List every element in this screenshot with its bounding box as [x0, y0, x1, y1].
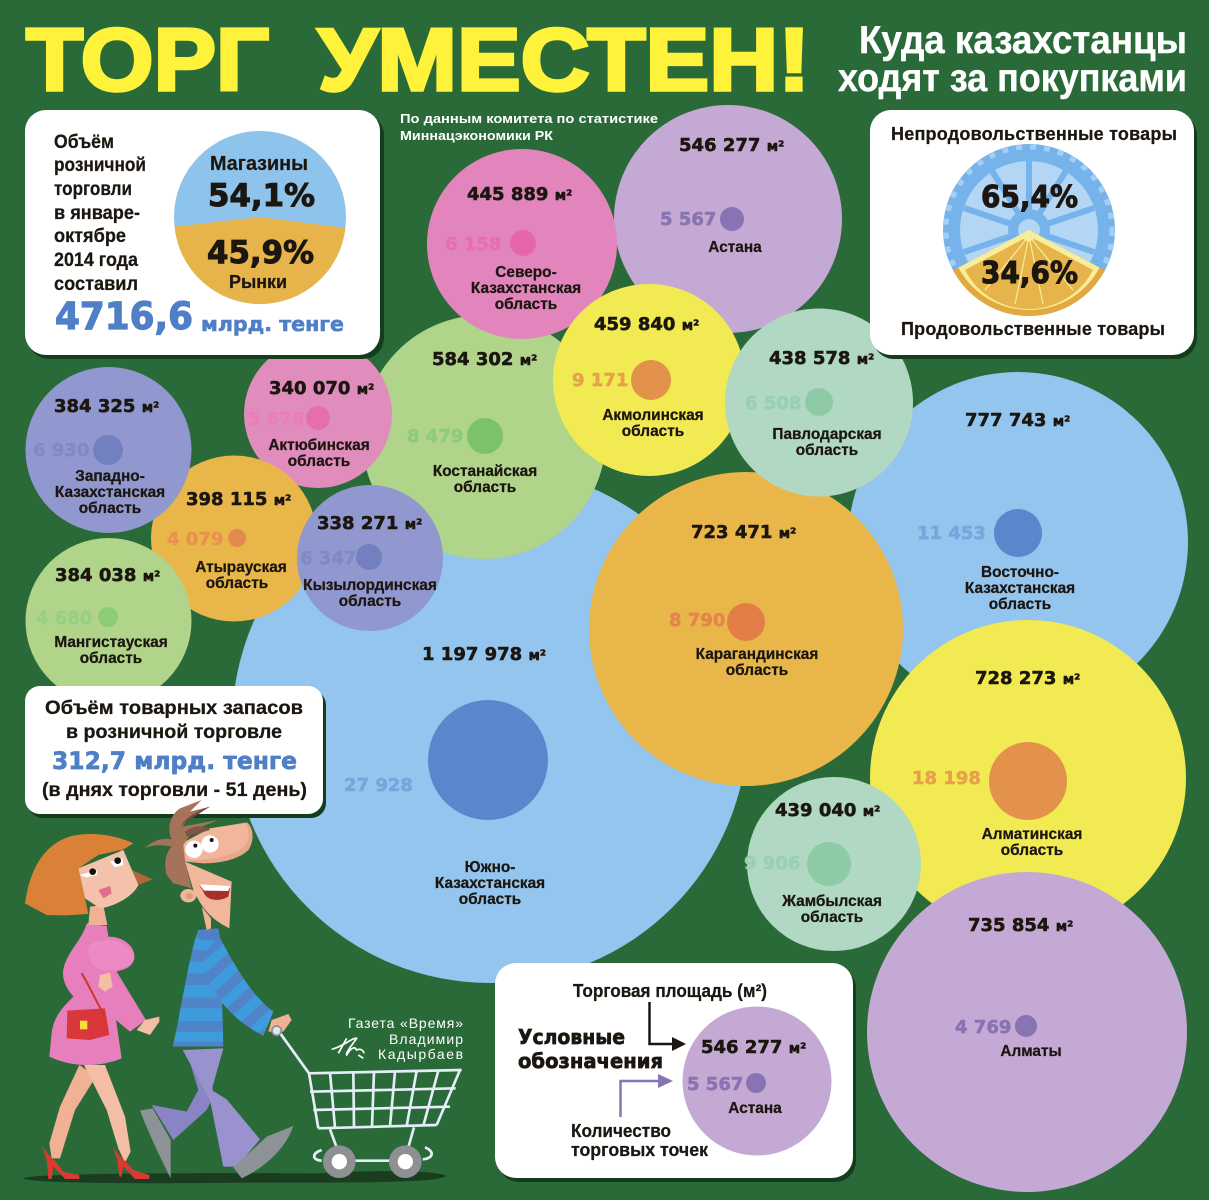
- legend sample circle: [682, 1006, 832, 1156]
- circle: Актюбинская область: область: [288, 453, 350, 470]
- panel: goods split: [870, 110, 1197, 359]
- circle: Актюбинская область: Актюбинская: [268, 437, 370, 454]
- circle: Актюбинская область: 340 070 м²: [269, 378, 374, 399]
- circle: Кызылординская область: Кызылординская: [303, 577, 437, 594]
- panel: legend: [495, 963, 856, 1182]
- circle: Алматы: 735 854 м²: [968, 915, 1073, 936]
- circle: Карагандинская область: 8 790: [669, 610, 725, 631]
- circle: Карагандинская область: 723 471 м²: [691, 522, 796, 543]
- title: [26, 10, 810, 109]
- circle: Жамбылская область: 9 906: [744, 853, 800, 874]
- circle: Алматинская область: Алматинская: [982, 826, 1082, 843]
- text: count label: торговых точек: [571, 1140, 709, 1160]
- circle: Павлодарская область: [725, 308, 913, 496]
- circle: Южно-Казахстанская область: Южно-: [465, 859, 515, 876]
- legend sample circle: Астана: [728, 1100, 782, 1117]
- big number: retail total: [55, 295, 344, 338]
- subtitle: [838, 19, 1187, 100]
- panel: inventory: [25, 686, 326, 818]
- circle: Акмолинская область: область: [622, 423, 684, 440]
- circle: Актюбинская область: 5 678: [248, 409, 304, 430]
- circle: Западно-Казахстанская область: [26, 367, 192, 533]
- text: legend heading: обозначения: [518, 1049, 663, 1073]
- circle: Западно-Казахстанская область: 384 325 м²: [54, 396, 159, 417]
- circle: Западно-Казахстанская область: 6 930: [33, 440, 89, 461]
- circle: Атырауская область: область: [206, 575, 268, 592]
- circle: Атырауская область: 4 079: [167, 529, 223, 550]
- text: area label: Торговая площадь (м²): [573, 981, 767, 1001]
- credit: [348, 1015, 463, 1062]
- circle: Астана: 546 277 м²: [679, 135, 784, 156]
- circle: Астана: [614, 105, 842, 333]
- circle: Северо-Казахстанская область: [427, 149, 617, 339]
- big number: retail total: 4716,6: [55, 295, 193, 338]
- circle: Алматинская область: область: [1001, 842, 1063, 859]
- circle: Костанайская область: 8 479: [407, 426, 463, 447]
- circle: Алматы: Алматы: [1000, 1043, 1062, 1060]
- circle: Северо-Казахстанская область: Северо-: [495, 264, 557, 281]
- circle: Кызылординская область: 6 347: [300, 548, 356, 569]
- circle: Восточно-Казахстанская область: Восточно-: [981, 564, 1059, 581]
- text: retail description: 2014 года: [54, 250, 138, 271]
- circle: Костанайская область: [362, 315, 606, 559]
- panel: inventory: (в днях торговли - 51 день): [42, 780, 307, 801]
- circle: Мангистауская область: область: [80, 650, 142, 667]
- credit: Кадырбаев: [378, 1046, 463, 1062]
- circle: Кызылординская область: [297, 485, 443, 631]
- circle: Южно-Казахстанская область: 1 197 978 м²: [422, 644, 546, 665]
- source note: [400, 111, 658, 143]
- circle: Жамбылская область: [744, 777, 921, 951]
- text: retail description: розничной: [54, 155, 146, 176]
- circle: Жамбылская область: область: [801, 909, 863, 926]
- chart: wheel and orange slice: 65,4%: [981, 180, 1078, 215]
- circle: Северо-Казахстанская область: 445 889 м²: [467, 184, 572, 205]
- text: count label: Количество: [571, 1121, 671, 1141]
- source note: Миннацэкономики РК: [400, 128, 553, 143]
- circle: Павлодарская область: 6 508: [745, 393, 801, 414]
- title: ТОРГ: [26, 10, 269, 109]
- circle: Восточно-Казахстанская область: [848, 372, 1188, 712]
- circle: Атырауская область: 398 115 м²: [186, 489, 291, 510]
- circle: Восточно-Казахстанская область: область: [989, 596, 1051, 613]
- signature: [332, 1038, 364, 1058]
- circle: Карагандинская область: область: [726, 662, 788, 679]
- circle: Костанайская область: 584 302 м²: [432, 349, 537, 370]
- circle: Жамбылская область: Жамбылская: [781, 893, 882, 910]
- circle: Алматы: [867, 872, 1187, 1192]
- big number: retail total: млрд. тенге: [201, 312, 344, 336]
- circle: Акмолинская область: [553, 284, 745, 476]
- chart: wheel and orange slice: [943, 144, 1115, 316]
- text: non-food heading: Непродовольственные товары: [891, 124, 1177, 144]
- text: retail description: Объём: [54, 132, 114, 153]
- pie: shops and markets: [174, 131, 346, 304]
- illustration: shoppers and cart: [23, 800, 462, 1183]
- circle: Северо-Казахстанская область: 6 158: [445, 234, 501, 255]
- circle: Алматинская область: 728 273 м²: [975, 668, 1080, 689]
- circle: Атырауская область: Атырауская: [195, 559, 287, 576]
- circle: Южно-Казахстанская область: Казахстанская: [435, 875, 545, 892]
- source note: По данным комитета по статистике: [400, 111, 658, 126]
- circle: Северо-Казахстанская область: область: [495, 296, 557, 313]
- circle: Южно-Казахстанская область: область: [459, 891, 521, 908]
- circle: Южно-Казахстанская область: [232, 467, 748, 983]
- subtitle: ходят за покупками: [838, 57, 1187, 100]
- circle: Кызылординская область: область: [339, 593, 401, 610]
- circle: Западно-Казахстанская область: Западно-: [75, 468, 145, 485]
- circle: Павлодарская область: Павлодарская: [772, 426, 882, 443]
- pie: shops and markets: Рынки: [229, 272, 287, 292]
- circle: Алматы: 4 769: [955, 1017, 1011, 1038]
- credit: Газета «Время»: [348, 1015, 463, 1031]
- subtitle: Куда казахстанцы: [859, 19, 1187, 62]
- circle: Южно-Казахстанская область: 27 928: [344, 775, 413, 796]
- shopping cart: [272, 1026, 462, 1174]
- text: retail description: октябре: [54, 226, 126, 247]
- circle: Павлодарская область: 438 578 м²: [769, 348, 874, 369]
- circle: Костанайская область: Костанайская: [433, 463, 537, 480]
- circle: Северо-Казахстанская область: Казахстанская: [471, 280, 581, 297]
- text: legend heading: [518, 1025, 663, 1073]
- circle: Западно-Казахстанская область: область: [79, 500, 141, 517]
- panel: retail volume: [25, 110, 384, 359]
- circle: Мангистауская область: 384 038 м²: [55, 565, 160, 586]
- arrow: count: [620, 1074, 673, 1117]
- circle: Актюбинская область: [244, 340, 392, 488]
- text: retail description: [54, 132, 146, 295]
- panel: inventory: в розничной торговле: [66, 722, 282, 743]
- title: УМЕСТЕН!: [318, 10, 810, 109]
- text: retail description: торговли: [54, 179, 132, 200]
- circle: Восточно-Казахстанская область: Казахстанская: [965, 580, 1075, 597]
- pie: shops and markets: Магазины: [210, 153, 308, 175]
- chart: wheel and orange slice: 34,6%: [981, 256, 1078, 291]
- circle: Астана: 5 567: [660, 209, 716, 230]
- circle: Карагандинская область: Карагандинская: [696, 646, 818, 663]
- ground shadow: [23, 1171, 447, 1183]
- circle: Алматинская область: 18 198: [912, 768, 981, 789]
- credit: Владимир: [389, 1031, 463, 1047]
- circle: Восточно-Казахстанская область: 777 743 м²: [965, 410, 1070, 431]
- panel: inventory: Объём товарных запасов: [45, 698, 303, 719]
- circle: Алматинская область: [870, 620, 1186, 936]
- man: [140, 800, 312, 1178]
- text: count label: [571, 1121, 709, 1160]
- circle: Акмолинская область: Акмолинская: [602, 407, 704, 424]
- circle: Акмолинская область: 459 840 м²: [594, 314, 699, 335]
- circle: Павлодарская область: область: [796, 442, 858, 459]
- circle: Астана: Астана: [708, 239, 762, 256]
- pie: shops and markets: 45,9%: [207, 235, 314, 271]
- woman: [25, 834, 159, 1179]
- circle: Акмолинская область: 9 171: [572, 370, 628, 391]
- circle: Мангистауская область: [26, 538, 192, 704]
- circle: Жамбылская область: 439 040 м²: [775, 800, 880, 821]
- circle: Костанайская область: область: [454, 479, 516, 496]
- circle: Мангистауская область: 4 680: [36, 608, 92, 629]
- circle: Кызылординская область: 338 271 м²: [317, 513, 422, 534]
- legend sample circle: 546 277 м²: [701, 1037, 806, 1058]
- text: food heading: Продовольственные товары: [901, 319, 1165, 339]
- circle: Восточно-Казахстанская область: 11 453: [917, 523, 986, 544]
- text: legend heading: Условные: [518, 1025, 625, 1049]
- text: retail description: в январе-: [54, 203, 140, 224]
- circle: Атырауская область: [151, 456, 317, 622]
- pie: shops and markets: 54,1%: [208, 178, 315, 214]
- text: retail description: составил: [54, 274, 138, 295]
- circle: Мангистауская область: Мангистауская: [54, 634, 168, 651]
- legend sample circle: 5 567: [687, 1074, 743, 1095]
- circle: Западно-Казахстанская область: Казахстанская: [55, 484, 165, 501]
- panel: inventory: 312,7 млрд. тенге: [52, 747, 297, 775]
- circle: Карагандинская область: [589, 472, 903, 786]
- arrow: area: [650, 1002, 686, 1051]
